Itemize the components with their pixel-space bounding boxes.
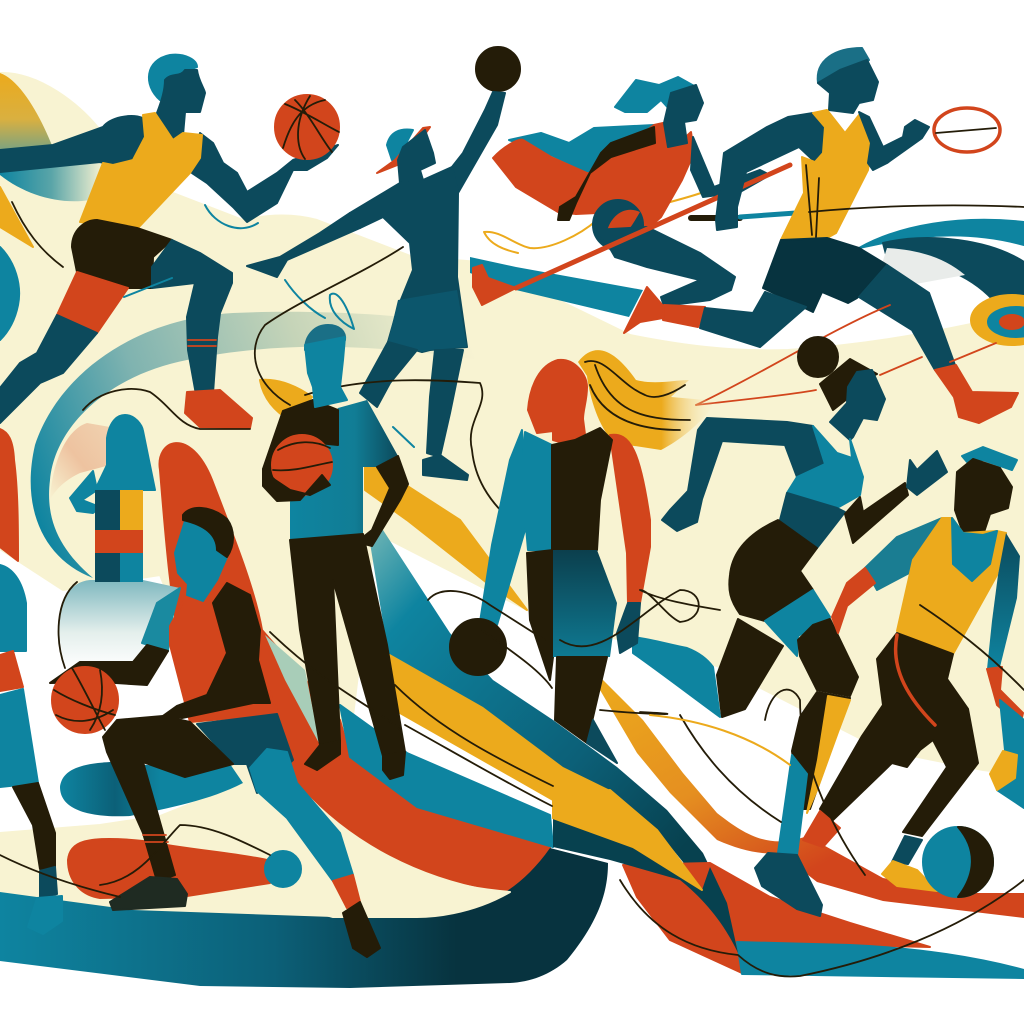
stick: orange foot	[473, 265, 516, 305]
leg	[594, 227, 735, 306]
ribbon: yellow to orange right band	[600, 677, 1024, 918]
lower leg teal	[778, 755, 807, 855]
swoosh: stippled teal wave under the arm	[0, 160, 103, 201]
stick: dark and teal bar	[691, 212, 810, 218]
stipple patch beside runner	[880, 248, 965, 285]
skirt dark	[527, 550, 553, 680]
right arm	[987, 533, 1020, 669]
cape red	[493, 140, 636, 214]
swoosh: centre teal band	[470, 257, 643, 317]
figure: runner top-right with racket	[700, 48, 1018, 423]
teal oval behind seated player	[60, 762, 243, 816]
right arm	[357, 456, 408, 546]
curves: red lines	[696, 305, 996, 405]
front arm	[859, 112, 929, 170]
figure: seated player with ball	[50, 508, 380, 957]
hair	[183, 508, 233, 557]
hair	[95, 415, 155, 490]
sock stripes	[188, 340, 216, 346]
neck and face	[175, 521, 227, 601]
rear leg	[700, 292, 806, 347]
ankle	[663, 305, 705, 327]
raised arm	[452, 92, 505, 193]
ribbon: lower teal band	[340, 705, 553, 847]
colour blocks	[95, 490, 143, 582]
vest stripes	[806, 165, 819, 237]
dark sleeve and forearm	[163, 583, 270, 718]
figure: jumping player with cap	[247, 47, 520, 480]
hair	[962, 447, 1017, 470]
vest	[80, 113, 202, 228]
head	[528, 360, 587, 450]
figure: running woman with bun	[662, 337, 947, 916]
cape teal	[509, 125, 654, 175]
hand	[907, 451, 947, 495]
swoosh: right dark arc	[883, 238, 1024, 300]
swoosh: teal crescent at left edge	[0, 247, 19, 340]
ribbon: yellow tip	[553, 790, 702, 890]
ribbon: teal bottom	[737, 942, 1024, 978]
forearm	[987, 667, 1023, 725]
hair	[820, 359, 877, 410]
ponytail hair	[615, 77, 696, 112]
back thigh	[717, 619, 783, 717]
figure: woman with blonde hair	[450, 350, 717, 763]
shorts and legs	[820, 633, 978, 836]
vest	[781, 110, 871, 240]
ribbon: dark tail over red	[553, 818, 738, 953]
teal sleeve	[142, 588, 180, 651]
shirt	[0, 565, 26, 651]
figure: small background woman	[50, 415, 155, 582]
figure: left-edge cropped player	[0, 565, 62, 934]
cap back	[387, 130, 413, 160]
shoe	[423, 455, 468, 480]
shoe	[624, 287, 664, 333]
front shoe	[935, 365, 1018, 423]
front leg	[152, 240, 232, 400]
ankle	[40, 867, 57, 898]
waist stripe	[896, 635, 935, 725]
shorts	[197, 714, 293, 793]
orange arm	[832, 568, 875, 633]
yellow squiggle	[484, 193, 701, 253]
swoosh: right teal arc	[859, 220, 1024, 248]
dark chest and sleeve	[263, 400, 338, 490]
teal sleeve	[765, 590, 830, 656]
right arm	[610, 435, 650, 603]
red vest	[0, 651, 23, 691]
left arm	[480, 430, 528, 625]
shirt	[290, 400, 398, 540]
ball	[450, 619, 506, 675]
wheel accent	[606, 210, 640, 245]
ribbon: sage wedge	[265, 635, 320, 745]
curve: black arc left	[12, 202, 63, 267]
figure: woman with cape	[484, 77, 770, 333]
left shoe	[110, 877, 187, 910]
lower leg yellow	[807, 696, 850, 813]
left arm and hand	[263, 469, 330, 501]
shorts shading	[388, 290, 467, 352]
ghost shape behind seated player	[58, 580, 180, 668]
hair	[818, 48, 869, 83]
wheel thigh	[593, 200, 643, 250]
curve: ghost outline	[59, 582, 77, 668]
shoe	[28, 896, 62, 934]
swoosh: top-left yellow-to-teal wave	[0, 73, 53, 165]
knee	[798, 619, 858, 696]
top	[787, 426, 863, 508]
ball	[476, 47, 520, 91]
face	[664, 85, 703, 147]
left ankle	[803, 811, 840, 847]
suit teal half	[522, 432, 552, 550]
left shoe	[305, 741, 340, 770]
rear arm and shoulder	[662, 418, 825, 531]
forearm with hand	[50, 645, 168, 685]
shorts	[729, 520, 817, 621]
front arm	[845, 483, 908, 543]
figure: standing man with basketball	[263, 325, 408, 779]
head and neck	[305, 337, 347, 407]
face	[818, 60, 878, 113]
leg	[555, 657, 607, 743]
right leg	[250, 749, 353, 881]
leg	[13, 783, 55, 869]
figure: player top-left with basketball	[0, 55, 339, 429]
small accent strokes	[124, 205, 414, 447]
stick: orange line	[516, 165, 790, 288]
trousers	[290, 534, 405, 756]
swoosh: small yellow patch behind standing man	[260, 380, 312, 420]
extended arm	[247, 213, 360, 277]
thigh and shin	[103, 716, 233, 881]
left edge orange bar	[0, 429, 18, 561]
racket	[934, 108, 1000, 152]
arm	[70, 471, 100, 513]
shorts	[72, 220, 172, 288]
rear leg	[587, 720, 617, 763]
right arm	[192, 133, 338, 222]
back leg	[0, 315, 97, 423]
background shape: cream over band corner	[290, 837, 510, 917]
lower leg dark	[792, 692, 850, 809]
basketball	[52, 667, 118, 733]
bottom dark teal band	[0, 848, 608, 988]
swoosh: large sage arc	[31, 312, 480, 578]
shirt	[170, 582, 278, 722]
sock stripes	[143, 835, 168, 842]
ball	[923, 827, 993, 897]
figure: player right with yellow vest	[803, 447, 1024, 897]
hair	[149, 55, 197, 100]
head	[955, 459, 1012, 535]
sleeve	[865, 518, 942, 590]
swoosh: yellow wedge at left	[0, 187, 33, 247]
curve: long black line top right	[809, 205, 1024, 212]
basketball	[275, 95, 339, 159]
basketball	[272, 435, 332, 495]
ribbon: yellow upper band	[365, 455, 527, 610]
ribbon: yellow main	[388, 653, 702, 890]
ribbon: red bottom	[623, 863, 930, 973]
right arm	[691, 137, 770, 197]
skirt teal	[553, 550, 617, 657]
right shoe	[383, 752, 405, 779]
curves: lower black lines	[0, 590, 1024, 977]
head and neck	[398, 130, 435, 183]
cap peak	[377, 127, 430, 173]
midriff	[780, 493, 845, 548]
ribbon: teal band right of woman	[633, 637, 720, 717]
right ankle	[333, 875, 360, 908]
orange oval	[68, 839, 270, 898]
legs	[360, 342, 417, 407]
bun	[798, 337, 838, 377]
torso	[576, 123, 694, 227]
suit dark half	[552, 428, 612, 550]
peach stipple	[50, 423, 110, 500]
orange thigh	[57, 272, 128, 333]
ribbon: red large band	[160, 443, 550, 892]
shorts	[763, 238, 887, 312]
icon: teal ball	[265, 851, 301, 887]
left arm and shoulder	[0, 116, 145, 172]
dark arm	[558, 127, 655, 220]
hand	[617, 603, 640, 653]
front leg	[859, 265, 956, 370]
hair	[578, 350, 717, 450]
shorts	[0, 689, 38, 787]
ribbon: teal upper to dark tip	[370, 530, 738, 953]
shoe	[185, 390, 252, 428]
rear arm	[716, 113, 825, 230]
chest	[952, 518, 997, 581]
icon: target disc at right edge	[971, 295, 1024, 345]
right ankle	[892, 836, 922, 864]
curve: shoe outline	[83, 389, 250, 429]
curves: upper black lines	[255, 247, 505, 515]
yellow shoe	[882, 861, 937, 891]
hair	[305, 325, 345, 350]
face and neck	[157, 70, 205, 140]
shoe	[755, 853, 822, 916]
torso	[350, 167, 467, 352]
vest	[897, 518, 1006, 654]
right-edge hand and ball	[990, 700, 1024, 808]
right shoe	[343, 902, 380, 957]
hair lines	[585, 361, 690, 430]
face and neck	[830, 370, 885, 440]
